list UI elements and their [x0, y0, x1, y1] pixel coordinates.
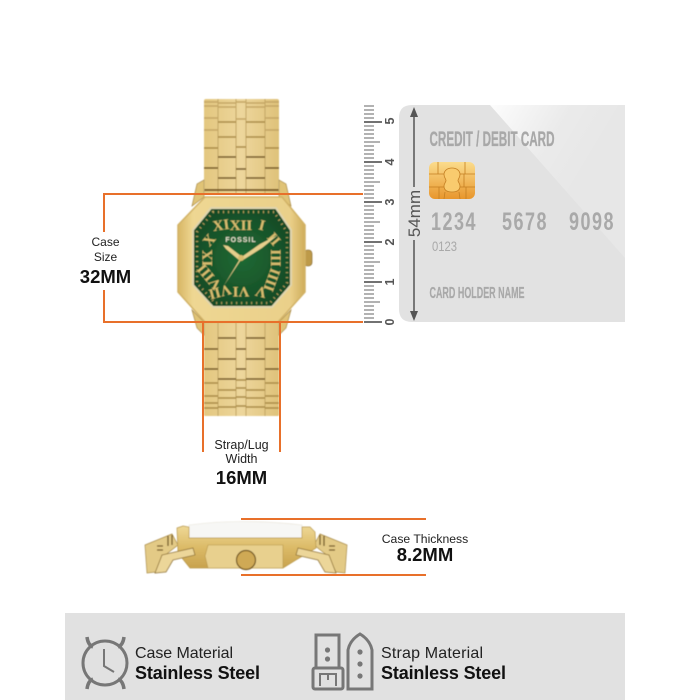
watch case [178, 197, 305, 322]
ruler numbers [383, 117, 397, 325]
case size label: Case [91, 235, 120, 249]
left lug [155, 548, 195, 573]
roman numerals: IX [200, 249, 216, 266]
card holder name: CARD HOLDER NAME [430, 285, 525, 302]
materials panel [65, 613, 625, 700]
strap material text: Strap Material [381, 645, 483, 662]
roman numerals: XI [212, 217, 231, 235]
ruler numbers: 5 [383, 117, 397, 124]
card numbers: 1234 [431, 207, 477, 236]
upper bracelet [204, 99, 279, 194]
case thickness label: Case Thickness [382, 532, 468, 546]
card heading: CREDIT / DEBIT CARD [430, 128, 554, 151]
watch lugs [192, 180, 291, 335]
roman numerals: IIII [259, 266, 283, 294]
ruler numbers: 1 [383, 278, 397, 285]
strap material text: Stainless Steel [381, 663, 506, 683]
credit card [399, 105, 625, 322]
card numbers [431, 207, 615, 236]
case size label [80, 235, 131, 287]
icon: watch [83, 637, 127, 689]
watch crystal [189, 522, 302, 538]
card small number: 0123 [432, 238, 457, 254]
right lug [296, 548, 336, 573]
54mm arrow [405, 107, 424, 321]
case thickness label [382, 532, 468, 565]
watch head front view [178, 180, 312, 335]
icon: strap [313, 634, 372, 689]
roman numerals: X [200, 231, 219, 250]
roman numerals: III [267, 249, 283, 267]
case material text: Case Material [135, 645, 233, 662]
strap width label: Strap/Lug [214, 438, 269, 452]
case material text [135, 645, 260, 683]
case thickness measure lines [241, 519, 426, 575]
strap material text [381, 645, 506, 683]
roman numerals: VIII [194, 260, 225, 292]
brand name: FOSSIL [225, 237, 257, 244]
ruler numbers: 0 [383, 318, 397, 325]
left bracelet [145, 534, 178, 573]
ruler numbers: 2 [383, 238, 397, 245]
strap width label: 16MM [216, 467, 267, 488]
roman numerals: XII [230, 218, 252, 234]
roman numerals: V [254, 282, 269, 300]
roman numerals: I [257, 217, 267, 234]
card numbers: 5678 [502, 207, 548, 236]
ruler numbers: 4 [383, 158, 397, 165]
case size measure lines [103, 194, 363, 322]
case thickness label: 8.2MM [397, 544, 453, 565]
watch crown [304, 250, 312, 266]
side crown [236, 550, 256, 570]
lower bracelet [204, 322, 279, 416]
roman numerals: VI [233, 283, 249, 299]
case size label: Size [94, 250, 117, 264]
ruler numbers: 3 [383, 198, 397, 205]
side view of watch [145, 522, 347, 573]
strap width measure lines [203, 322, 280, 452]
case size label: 32MM [80, 266, 131, 287]
roman numerals: II [263, 230, 283, 249]
54mm arrow: 54mm [405, 190, 424, 237]
strap width label [214, 438, 269, 488]
right bracelet [314, 534, 347, 573]
roman numerals [194, 217, 283, 302]
case body [177, 526, 316, 568]
watch hands [223, 235, 278, 287]
ruler [364, 104, 397, 325]
case material text: Stainless Steel [135, 663, 260, 683]
card numbers: 9098 [569, 207, 615, 236]
card chip [429, 162, 475, 199]
strap width label: Width [226, 452, 258, 466]
watch dial [193, 208, 291, 307]
roman numerals: VII [207, 280, 233, 302]
